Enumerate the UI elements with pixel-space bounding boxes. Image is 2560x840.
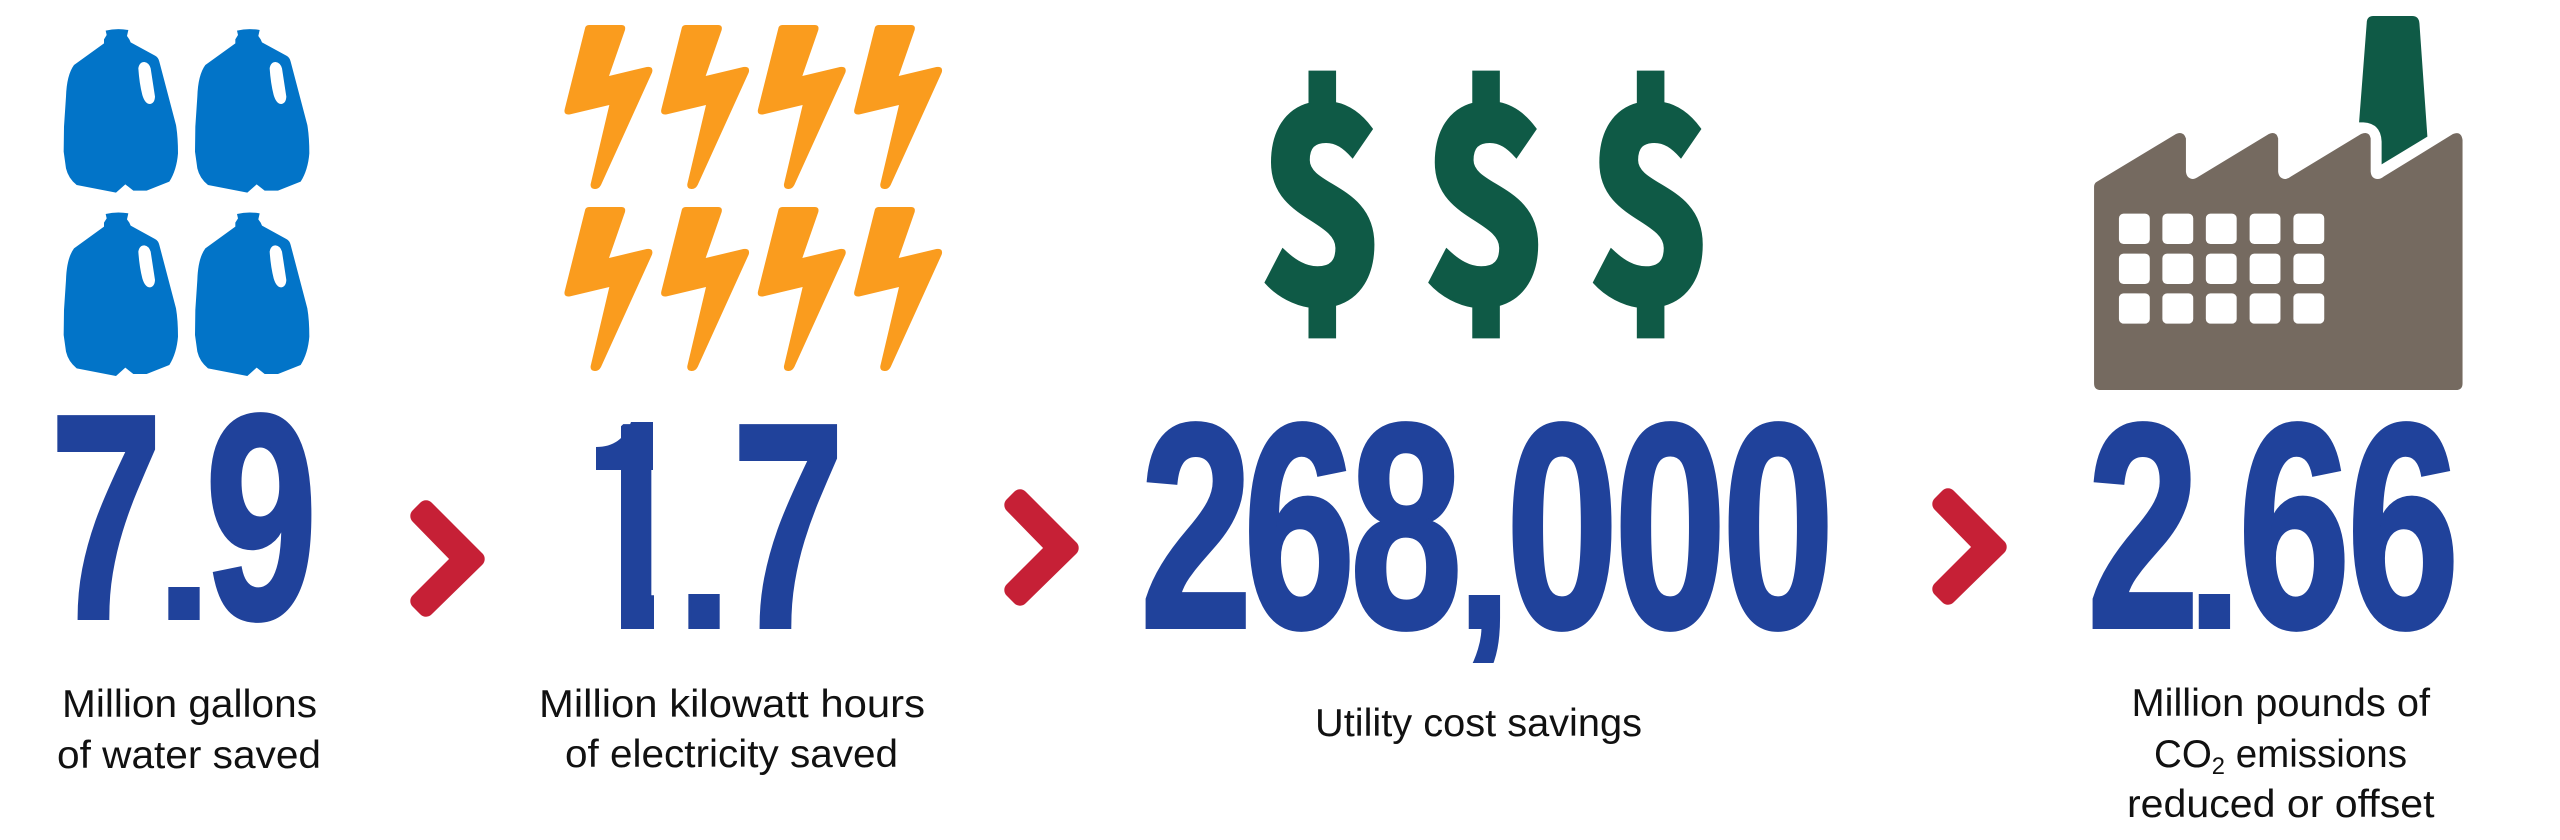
- caption: water: [57, 683, 321, 777]
- number: 2.66: 6: [2238, 364, 2351, 690]
- panel: utility cost savings: [1140, 0, 1835, 745]
- caption: emissions: Million pounds of: [2132, 682, 2430, 725]
- icon: three dollar signs: $: [1257, 0, 1388, 382]
- number: 268,000: ,: [1456, 364, 1512, 690]
- arrow: chevron one: [418, 508, 477, 609]
- number: 268,000: 6: [1243, 364, 1356, 690]
- panel: CO2 emissions: [2087, 16, 2463, 826]
- panel: electricity saved: [539, 25, 942, 776]
- caption: emissions: CO: [2154, 733, 2212, 776]
- caption: water: Million gallons: [62, 683, 317, 726]
- number: 268,000: 2: [1140, 364, 1253, 690]
- number: 268,000: 0: [1614, 364, 1727, 690]
- caption: emissions: reduced or offset: [2127, 783, 2435, 826]
- caption: electricity: Million kilowatt hours: [539, 683, 925, 726]
- number: 2.66: 6: [2347, 364, 2460, 690]
- number: 268,000: 8: [1350, 364, 1462, 690]
- factory building: [2094, 133, 2463, 390]
- number: 1.7: .: [676, 364, 732, 690]
- panel: water saved: [50, 29, 321, 777]
- icon: four water jugs: [64, 29, 309, 376]
- number: 268,000: 0: [1722, 364, 1835, 690]
- arrow: chevron two: [1012, 497, 1071, 598]
- icon: eight lightning bolts: [564, 25, 942, 371]
- number: 2.66: 2: [2087, 364, 2200, 690]
- number: 2.66: .: [2186, 364, 2243, 690]
- number: 7.9: 9: [205, 355, 318, 681]
- icon: factory: [2094, 16, 2463, 390]
- number: 1.7: 1: [575, 364, 688, 690]
- caption: utility: Utility cost savings: [1315, 702, 1642, 745]
- caption: electricity: of electricity saved: [565, 733, 898, 776]
- icon: three dollar signs: $: [1421, 0, 1552, 382]
- number: 7.9: .: [156, 355, 212, 681]
- number: 1.7: 7: [732, 364, 845, 690]
- caption: emissions: 2: [2212, 753, 2225, 780]
- icon: three dollar signs: $: [1585, 0, 1716, 382]
- caption: emissions: emissions: [2225, 733, 2407, 776]
- number: 7.9: 7: [50, 355, 163, 681]
- number: 268,000: 0: [1506, 364, 1618, 690]
- caption: water: of water saved: [57, 734, 321, 777]
- factory chimney: [2359, 16, 2427, 164]
- caption: electricity: [539, 683, 925, 776]
- arrow: chevron three: [1940, 496, 1999, 597]
- factory windows: [2119, 214, 2324, 324]
- caption: emissions: [2127, 682, 2435, 826]
